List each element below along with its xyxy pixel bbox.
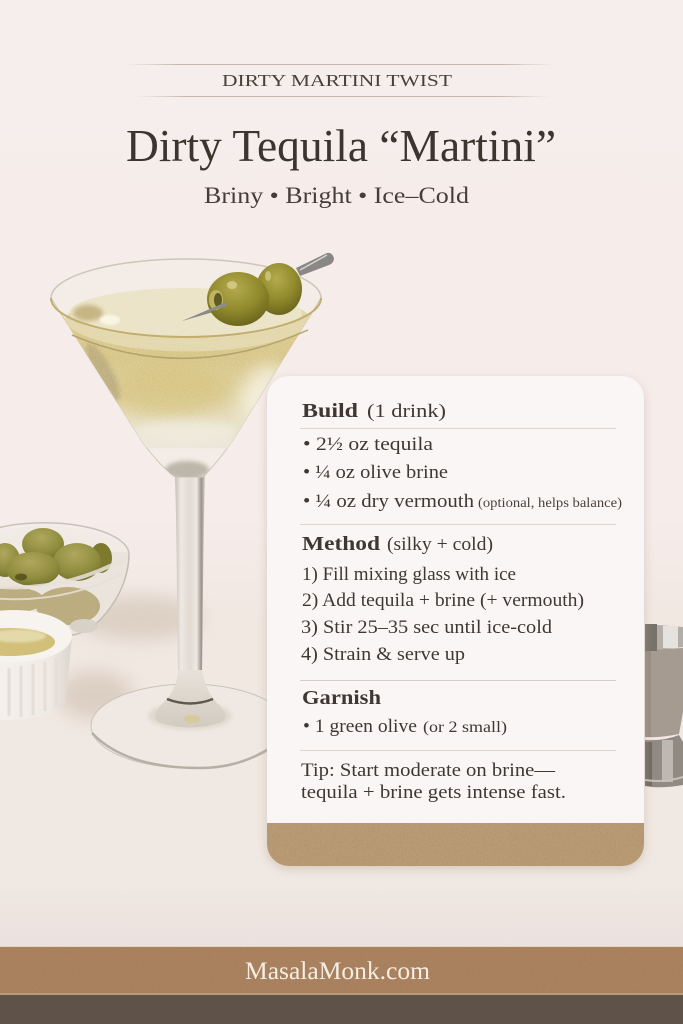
section: method: 1) Fill mixing glass with ice — [302, 565, 516, 585]
olive back — [256, 263, 302, 315]
title: Dirty Tequila “Martini” — [126, 120, 556, 171]
brine — [0, 628, 55, 656]
section: build: (1 drink) — [367, 401, 446, 422]
section: build: Build — [302, 401, 358, 422]
section: method: (silky + cold) — [387, 534, 493, 555]
footer — [0, 946, 683, 1024]
section: method — [301, 534, 584, 665]
footer band — [0, 947, 683, 994]
liquid — [64, 288, 310, 477]
bowl — [51, 259, 321, 477]
jigger upper cup — [645, 648, 683, 737]
section: method: Method — [302, 534, 380, 555]
header — [125, 64, 556, 208]
bowl rim front — [0, 558, 126, 587]
website: MasalaMonk.com — [245, 958, 431, 985]
ramekin rim — [0, 610, 72, 662]
rim highlights — [51, 298, 321, 337]
ramekin — [0, 610, 72, 720]
card band — [267, 823, 644, 866]
section: method: 2) Add tequila + brine (+ vermouth) — [302, 591, 584, 611]
lower olives through glass — [36, 587, 100, 625]
glass foot — [91, 668, 287, 768]
olive front — [207, 272, 269, 326]
table shadows — [57, 596, 202, 719]
section: garnish: • 1 green olive — [303, 717, 417, 737]
tip: Tip: Start moderate on brine— — [301, 761, 556, 781]
section: build — [300, 401, 622, 512]
section: build: (optional, helps balance) — [478, 496, 622, 511]
ramekin body — [0, 638, 72, 720]
section: method: 3) Stir 25–35 sec until ice-cold — [301, 618, 553, 638]
section: method: 4) Strain & serve up — [301, 645, 465, 665]
olive hole — [209, 290, 223, 310]
jigger — [645, 624, 683, 787]
eyebrow: DIRTY MARTINI TWIST — [222, 71, 453, 90]
glass bowl body — [0, 526, 129, 635]
section: garnish: Garnish — [302, 688, 381, 709]
stem — [175, 476, 205, 670]
foot cone — [155, 668, 226, 728]
martini glass — [40, 253, 340, 768]
section: build: • 2½ oz tequila — [303, 434, 434, 455]
subtitle: Briny • Bright • Ice–Cold — [204, 183, 470, 208]
tip — [301, 761, 566, 803]
bowl of olives — [0, 522, 140, 635]
jigger lower cup — [645, 735, 683, 787]
olives — [0, 528, 112, 586]
section: garnish: (or 2 small) — [423, 719, 507, 736]
recipe card — [267, 376, 644, 869]
section: garnish — [302, 688, 507, 737]
tip: tequila + brine gets intense fast. — [301, 783, 566, 803]
footer base — [0, 995, 683, 1024]
section: build: • ¼ oz dry vermouth — [303, 491, 475, 512]
cocktail pick — [182, 253, 334, 321]
section: build: • ¼ oz olive brine — [303, 462, 448, 483]
